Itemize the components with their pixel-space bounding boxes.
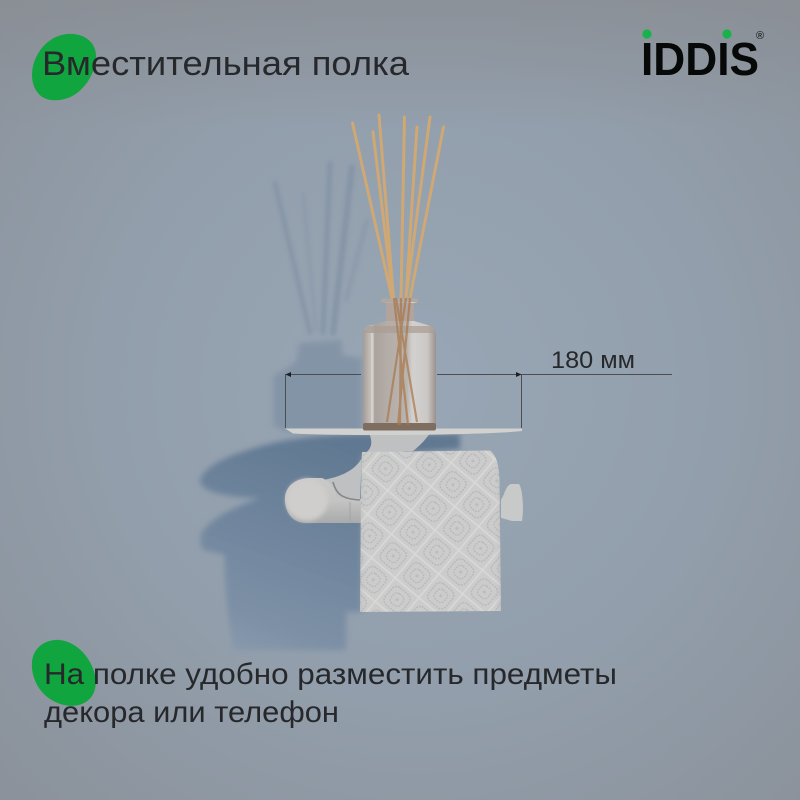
holder left arm bbox=[285, 478, 362, 523]
description text: декора или телефон bbox=[44, 696, 339, 729]
dimension label: 180 мм bbox=[551, 347, 635, 374]
shadow: holder and roll on wall bbox=[200, 434, 460, 650]
toilet paper roll bbox=[360, 450, 501, 612]
dimension line: shelf width 180 mm bbox=[286, 372, 672, 428]
holder right end cap bbox=[501, 484, 523, 521]
green blob behind description bbox=[32, 640, 96, 706]
green blob behind heading bbox=[32, 34, 96, 100]
description text bbox=[44, 658, 617, 729]
shelf plate bbox=[285, 428, 522, 435]
IDDIS logo: IDDIS bbox=[641, 33, 759, 85]
reed sticks above bottle bbox=[352, 115, 444, 298]
shadow: reed sticks on wall bbox=[275, 163, 367, 333]
shelf support bracket bbox=[323, 433, 430, 500]
description text: На полке удобно разместить предметы bbox=[44, 658, 617, 691]
heading: Вместительная полка bbox=[42, 45, 409, 83]
IDDIS logo: ® bbox=[756, 30, 764, 42]
reeds inside bottle bbox=[387, 298, 417, 425]
shadow: bottle on wall bbox=[273, 340, 362, 432]
glass bottle bbox=[363, 298, 436, 430]
